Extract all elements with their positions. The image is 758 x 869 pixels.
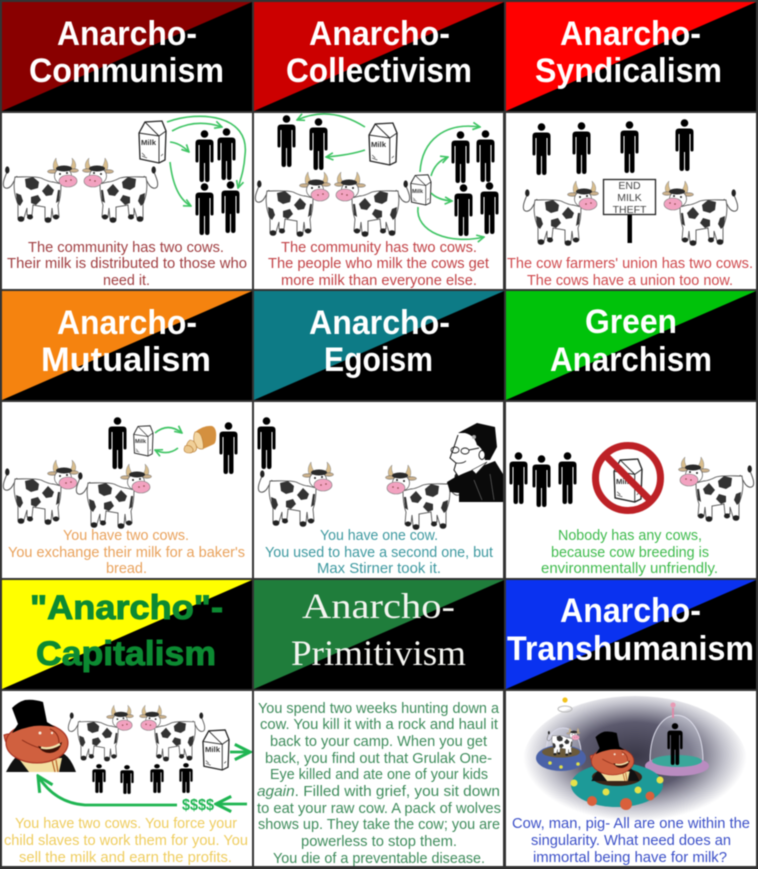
icon: milk carton: Milk <box>141 140 156 147</box>
header banner <box>254 291 504 400</box>
caption: You have two cows. You force your <box>15 816 237 832</box>
caption: Cow, man, pig- All are one within the <box>512 816 750 832</box>
heading <box>30 589 223 673</box>
caption: You exchange their milk for a baker's <box>8 545 245 561</box>
caption: sell the milk and earn the profits. <box>19 850 232 866</box>
heading: Anarcho- <box>560 15 701 53</box>
people <box>108 417 238 474</box>
caption: You used to have a second one, but <box>265 545 493 561</box>
heading: Anarchism <box>550 341 712 379</box>
cows <box>3 158 158 223</box>
story text: back to your camp. When you get <box>270 734 487 750</box>
caption <box>265 528 493 577</box>
cows <box>255 172 410 237</box>
heading: Anarcho- <box>57 304 197 342</box>
caption <box>507 256 753 289</box>
caption: The community has two cows. <box>281 240 477 256</box>
heading <box>535 15 722 90</box>
caption: Their milk is distributed to those who <box>7 256 247 272</box>
heading <box>550 303 712 379</box>
space cloud <box>523 696 747 828</box>
people <box>532 119 694 175</box>
arrows: milk distribution <box>167 116 245 206</box>
icon: milk carton: Milk <box>205 747 220 754</box>
heading: Anarcho- <box>57 15 197 53</box>
caption: bread. <box>106 561 147 577</box>
story text: to eat your raw cow. A pack of wolves <box>257 801 501 817</box>
arrow: money in <box>216 803 247 805</box>
heading: Capitalism <box>36 635 216 673</box>
caption: You have one cow. <box>320 528 438 544</box>
panel: anarcho-mutualism <box>2 291 252 578</box>
caption: The cow farmers' union has two cows. <box>507 256 753 272</box>
caption <box>4 816 248 866</box>
story text panel <box>254 691 503 866</box>
portrait: Max Stirner <box>447 423 503 502</box>
ufo: person <box>645 702 709 776</box>
header banner <box>506 580 756 689</box>
person <box>258 417 276 469</box>
caption <box>7 240 247 289</box>
panel: anarcho-communism <box>2 2 252 289</box>
panel: anarcho-primitivism <box>254 580 504 867</box>
heading: Mutualism <box>41 341 211 379</box>
illustration panel <box>254 402 503 578</box>
heading: Collectivism <box>286 52 472 90</box>
heading: Anarcho- <box>560 592 701 630</box>
heading: Green <box>585 303 677 341</box>
header banner <box>2 580 252 689</box>
story text: back, you find out that Grulak One- <box>265 751 492 767</box>
heading: Anarcho- <box>309 304 450 342</box>
icon: milk carton <box>203 730 229 770</box>
illustration panel <box>2 691 252 866</box>
story text: shows up. They take the cow; you are <box>258 817 500 833</box>
panel: anarcho-capitalism <box>2 580 252 866</box>
protest sign <box>604 180 656 243</box>
illustration panel <box>506 691 756 866</box>
illustration panel <box>2 113 252 289</box>
panel: anarcho-egoism <box>254 291 504 578</box>
caption <box>268 240 489 289</box>
icon: bread <box>184 426 216 453</box>
illustration panel <box>2 402 252 578</box>
caption: immortal being have for milk? <box>533 850 727 866</box>
story text <box>257 701 501 867</box>
header banner <box>254 580 504 689</box>
caption <box>541 528 718 577</box>
cows <box>68 705 205 761</box>
child slaves <box>92 763 193 794</box>
caption: Nobody has any cows, <box>558 528 702 544</box>
heading <box>29 15 224 90</box>
money label: $$$$ <box>182 797 214 814</box>
arrow: profits to capitalist <box>38 776 177 805</box>
icon: milk carton <box>139 121 166 163</box>
panel: green anarchism <box>506 291 756 578</box>
caption <box>8 528 245 577</box>
cows <box>3 460 151 529</box>
illustration panel <box>506 113 756 289</box>
people <box>278 115 498 236</box>
caption: because cow breeding is <box>551 545 709 561</box>
panel: anarcho-transhumanism <box>506 580 756 866</box>
illustration panel <box>506 402 756 578</box>
ufo: cow <box>536 697 586 771</box>
caption: more milk than everyone else. <box>281 273 477 289</box>
caption: environmentally unfriendly. <box>541 561 718 577</box>
arrow: milk out <box>230 751 250 753</box>
heading: Anarcho- <box>309 15 450 53</box>
heading: "Anarcho"- <box>30 589 223 627</box>
heading <box>286 15 472 90</box>
panel: anarcho-syndicalism <box>506 2 756 289</box>
icon: milk carton <box>134 426 153 456</box>
illustration panel <box>254 113 503 289</box>
header banner <box>506 291 756 400</box>
header banner <box>254 2 504 111</box>
caption: Max Stirner took it. <box>317 561 441 577</box>
protest sign: END <box>618 180 641 192</box>
capitalist pig <box>4 700 76 772</box>
heading <box>291 586 466 673</box>
arrows <box>297 114 484 239</box>
header banner <box>2 291 252 400</box>
icon: milk carton: Milk <box>135 439 146 445</box>
panel: anarcho-collectivism <box>254 2 504 289</box>
protest sign: THEFT <box>613 204 647 216</box>
people <box>196 128 240 235</box>
arrows: exchange <box>155 428 182 453</box>
caption: You have two cows. <box>63 528 189 544</box>
heading: Syndicalism <box>535 52 722 90</box>
caption: The people who milk the cows get <box>268 256 489 272</box>
story text: powerless to stop them. <box>301 834 457 850</box>
header banner <box>2 2 252 111</box>
caption: The cows have a union too now. <box>527 273 733 289</box>
story text: again. Filled with grief, you sit down <box>257 784 500 800</box>
heading <box>309 304 450 379</box>
heading: Primitivism <box>291 633 466 673</box>
caption: child slaves to work them for you. You <box>4 833 248 849</box>
cow <box>678 457 754 522</box>
story text: You die of a preventable disease. <box>273 851 485 867</box>
icon: no milk sign <box>596 446 660 510</box>
caption: singularity. What need does an <box>531 833 731 849</box>
icon: large milk carton <box>369 123 397 165</box>
cows <box>523 181 738 246</box>
caption <box>512 816 750 866</box>
protest sign: MILK <box>617 192 642 204</box>
heading: Communism <box>29 52 224 90</box>
icon: no milk sign: Milk <box>616 479 631 486</box>
story text: cow. You kill it with a rock and haul it <box>260 717 498 733</box>
ufo: pig <box>570 732 664 810</box>
caption: need it. <box>103 273 150 289</box>
icon: large milk carton: Milk <box>371 142 386 149</box>
heading <box>41 304 211 379</box>
heading <box>507 592 754 668</box>
icon: small milk carton: Milk <box>412 189 423 195</box>
heading: Anarcho- <box>302 586 455 626</box>
story text: Eye killed and ate one of your kids <box>270 767 488 783</box>
header banner <box>506 2 756 111</box>
heading: Egoism <box>324 341 433 379</box>
cows <box>258 462 461 530</box>
people <box>510 452 576 507</box>
icon: small milk carton <box>411 175 431 205</box>
story text: You spend two weeks hunting down a <box>258 701 500 717</box>
caption: The community has two cows. <box>28 240 224 256</box>
